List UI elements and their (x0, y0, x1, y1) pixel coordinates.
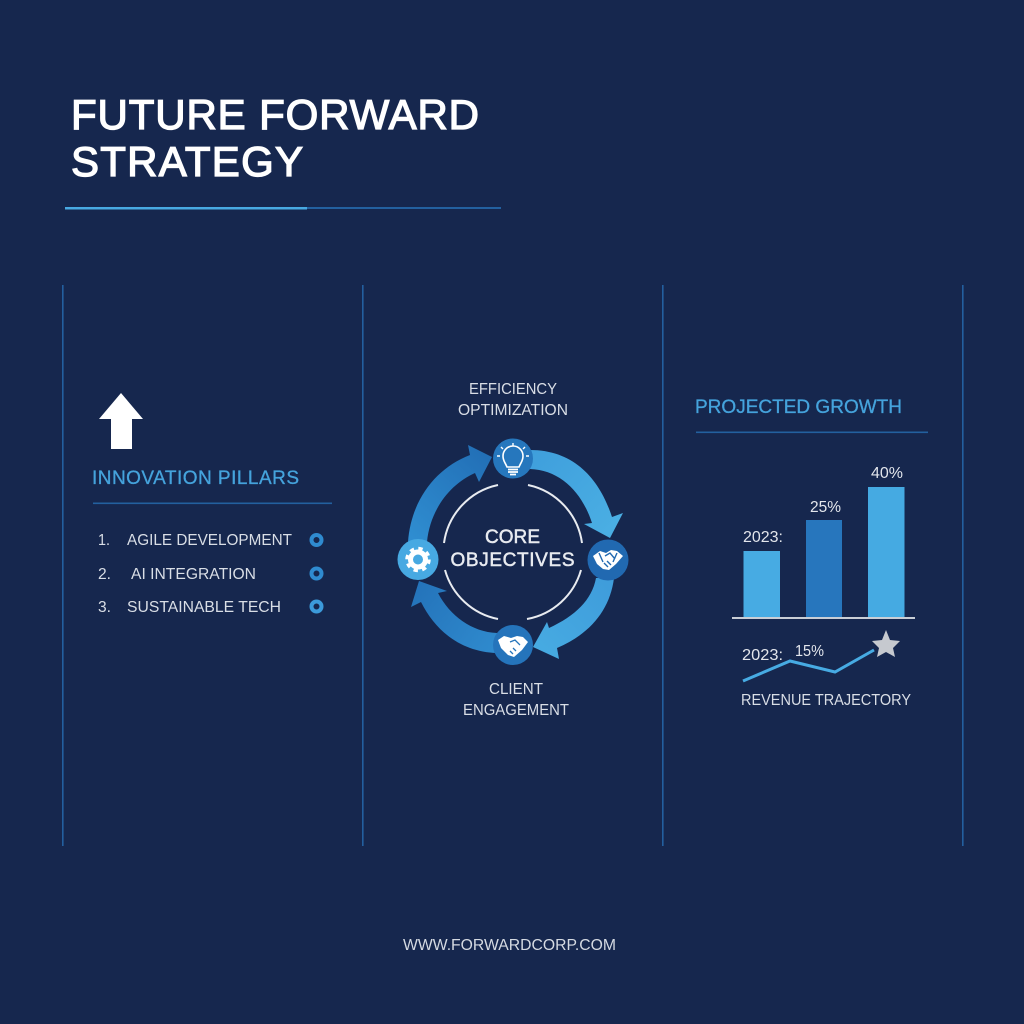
caption: revenue trajectory: REVENUE TRAJECTORY (741, 692, 911, 709)
value labels (743, 465, 903, 546)
title: STRATEGY (71, 138, 303, 185)
arrow: bottom to left (411, 581, 497, 653)
label: efficiency optimization (458, 381, 568, 419)
list item 1: AGILE DEVELOPMENT (127, 532, 292, 549)
list item 2: 2. (98, 566, 111, 583)
line labels: 2023: (742, 647, 783, 664)
center label: core objectives: OBJECTIVES (450, 550, 574, 571)
line labels: 15% (795, 643, 824, 660)
icon: up arrow (99, 393, 143, 449)
value labels: 2023: (743, 529, 783, 546)
title underline (65, 207, 501, 210)
column dividers (62, 285, 964, 846)
panel: core objectives cycle (398, 381, 628, 719)
icon: handshake node bottom (493, 625, 533, 665)
list item 3: 3. (98, 599, 111, 616)
title (71, 91, 479, 185)
icon: gear node (398, 539, 438, 580)
label: client engagement (463, 681, 570, 719)
icon: star (872, 630, 900, 657)
bar 40% (868, 487, 904, 618)
revenue trajectory line (741, 630, 911, 709)
footer url: WWW.FORWARDCORP.COM (403, 937, 616, 954)
center label: core objectives: CORE (485, 527, 540, 548)
inner ring (444, 485, 582, 619)
arrow: top to right (530, 450, 623, 538)
bar 25% (806, 520, 842, 618)
value labels: 40% (871, 465, 903, 482)
line labels (742, 643, 824, 664)
heading: innovation pillars: INNOVATION PILLARS (92, 468, 299, 489)
icon: handshake node right (588, 540, 628, 580)
label: efficiency optimization: OPTIMIZATION (458, 402, 568, 419)
heading: projected growth: PROJECTED GROWTH (695, 397, 902, 418)
bar chart (732, 465, 915, 619)
arrow: right to bottom (533, 578, 614, 659)
list item 1: 1. (98, 532, 110, 549)
value labels: 25% (810, 499, 841, 516)
panel: innovation pillars (92, 393, 332, 616)
heading rule (696, 432, 928, 433)
panel: projected growth (695, 397, 928, 709)
bar 2023 (744, 551, 780, 618)
center label: core objectives (450, 527, 574, 571)
label: client engagement: ENGAGEMENT (463, 702, 570, 719)
label: client engagement: CLIENT (489, 681, 544, 698)
chart baseline (732, 617, 915, 619)
arrow: left to top (408, 445, 492, 542)
label: efficiency optimization: EFFICIENCY (469, 381, 557, 398)
list item 3: SUSTAINABLE TECH (127, 599, 281, 616)
title: FUTURE FORWARD (71, 91, 479, 138)
list item 2 (98, 566, 322, 583)
heading rule (93, 502, 332, 504)
list item 2: AI INTEGRATION (131, 566, 256, 583)
icon: lightbulb node (493, 438, 533, 478)
